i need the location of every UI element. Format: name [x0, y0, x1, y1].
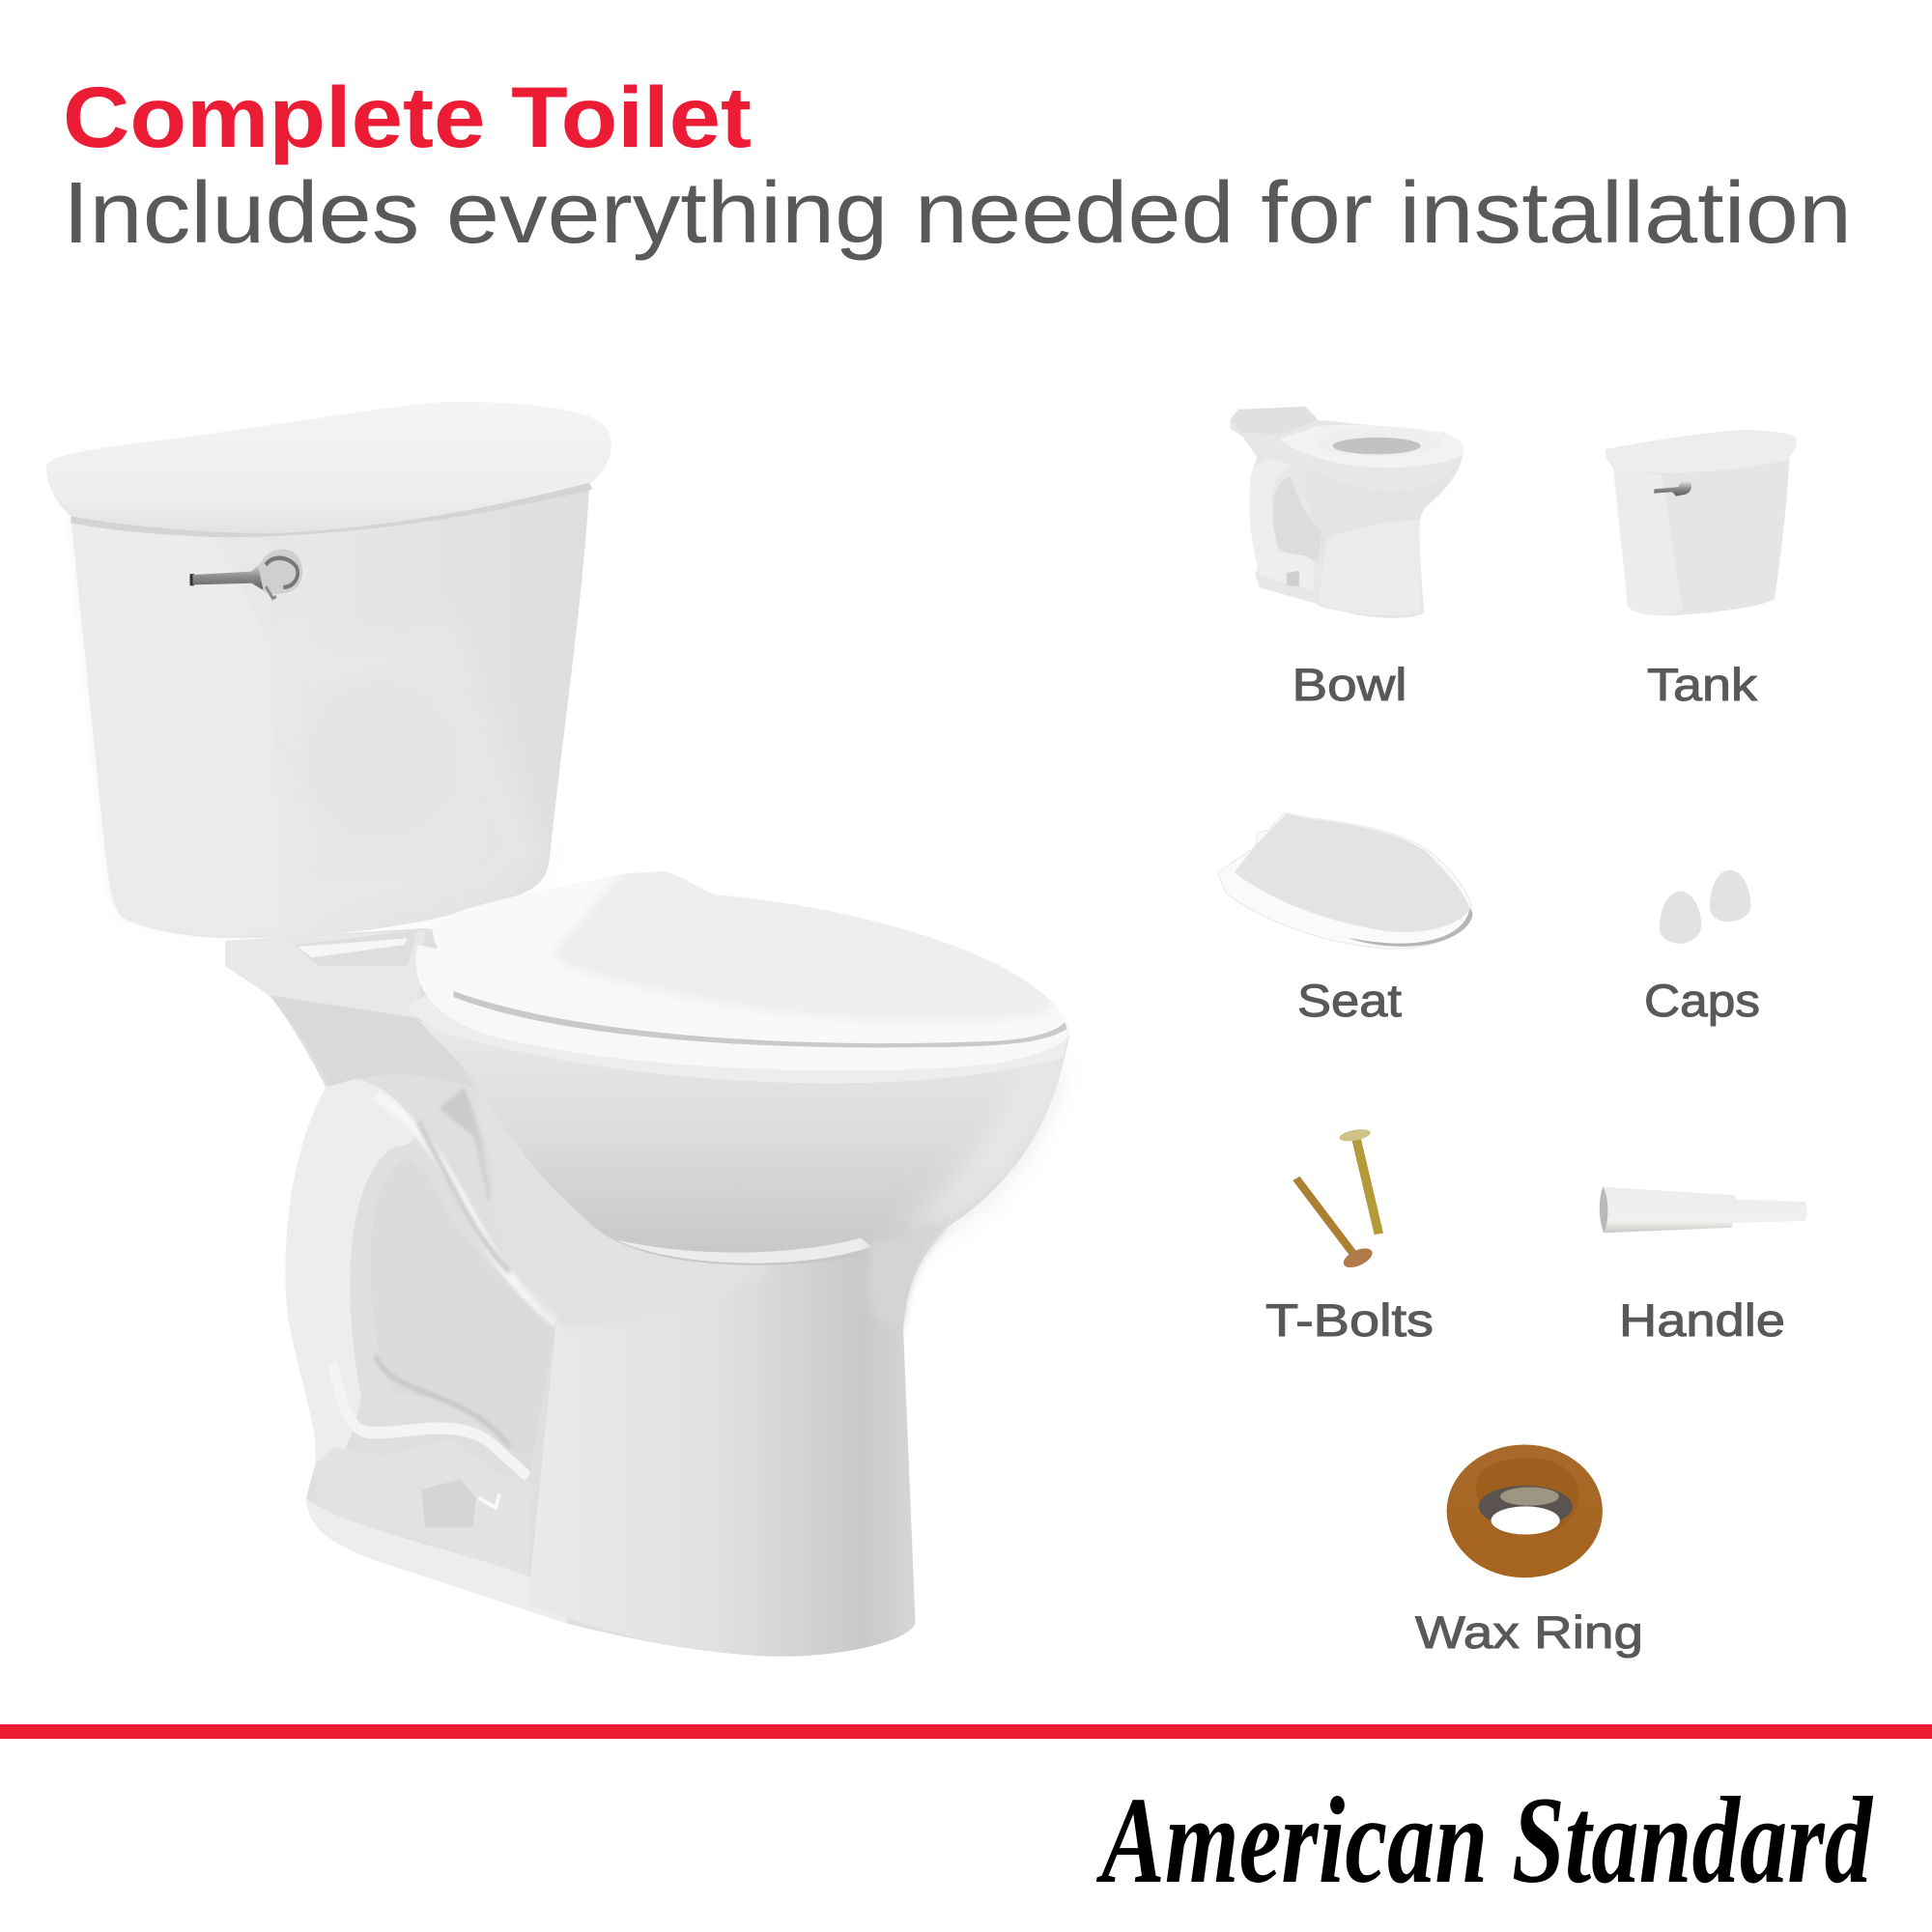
toilet base and trapway	[225, 930, 567, 1624]
bowl neck shading	[474, 1079, 780, 1328]
seat label: Seat	[1297, 975, 1402, 1026]
bowl label: Bowl	[1293, 659, 1406, 710]
caps label: Caps	[1644, 975, 1760, 1026]
wax ring label: Wax Ring	[1415, 1606, 1643, 1658]
part: wax ring	[1415, 1444, 1643, 1658]
red divider bar	[0, 1724, 1932, 1739]
wax ring illustration	[1447, 1444, 1603, 1577]
toilet tank body	[71, 483, 589, 938]
seat illustration	[1217, 813, 1472, 949]
bowl rim	[408, 995, 1069, 1083]
tank label: Tank	[1647, 659, 1758, 710]
part: seat	[1217, 813, 1472, 1026]
heading	[63, 69, 1852, 262]
subtitle: Includes everything needed for installation	[63, 165, 1852, 262]
part: caps	[1644, 870, 1760, 1026]
title: complete toilet: Complete Toilet	[63, 69, 752, 165]
toilet seat lid	[433, 871, 1053, 1016]
part: tank	[1605, 430, 1797, 710]
handle label: Handle	[1619, 1294, 1785, 1346]
part: handle	[1600, 1187, 1807, 1346]
handle illustration	[1600, 1187, 1807, 1233]
main toilet illustration	[46, 402, 1069, 1657]
t-bolts illustration	[1296, 1127, 1378, 1271]
flush handle	[190, 550, 302, 598]
t-bolts label: T-Bolts	[1265, 1294, 1434, 1346]
pedestal	[527, 1226, 950, 1657]
toilet tank lid	[46, 402, 611, 537]
seat edge line	[453, 991, 1067, 1047]
caps illustration	[1660, 870, 1750, 944]
part: t-bolts	[1265, 1127, 1434, 1346]
part: bowl	[1230, 407, 1464, 710]
toilet silhouette	[225, 928, 1069, 1657]
bowl illustration	[1230, 407, 1464, 618]
tank illustration	[1605, 430, 1797, 615]
toilet seat ring	[415, 945, 1069, 1070]
bowl exterior	[418, 1020, 1066, 1330]
